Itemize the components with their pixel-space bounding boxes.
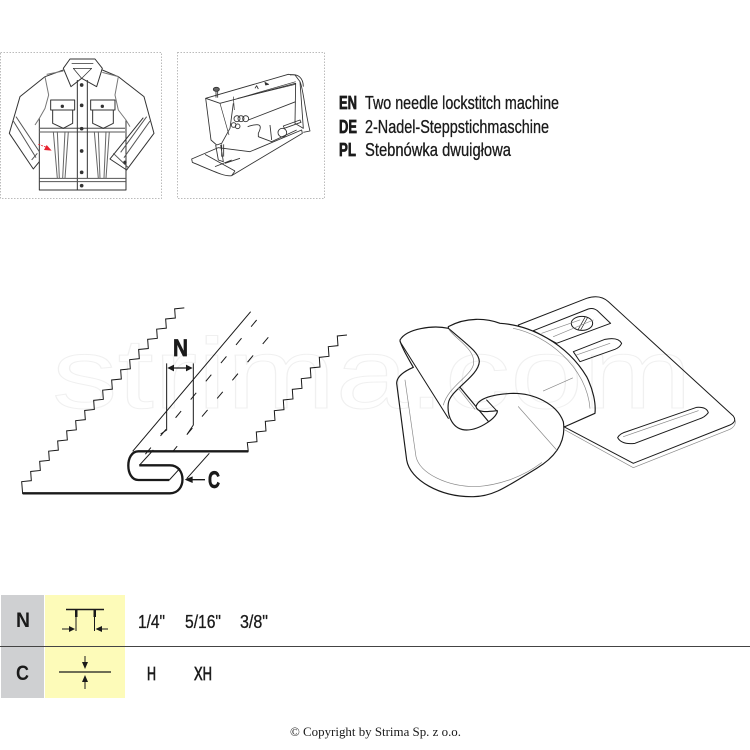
copyright: © Copyright by Strima Sp. z o.o. [290, 724, 461, 739]
watermark: strima.com [52, 318, 692, 430]
dimension N [161, 363, 193, 434]
diagram: fabric fold cross-section [22, 308, 347, 494]
row C: H [147, 664, 156, 684]
panel: jacket [0, 52, 162, 198]
icon: material thickness [59, 656, 111, 689]
panel: sewing machine [178, 52, 324, 198]
fold profile [23, 451, 248, 493]
label: EN: Two needle lockstitch machine [365, 93, 559, 113]
right fabric zigzag edge [247, 335, 347, 452]
folder curl [397, 327, 564, 497]
icon: sewing machine drawing [192, 74, 310, 176]
row C: XH [194, 664, 212, 684]
row N: 1/4" [138, 612, 165, 632]
row C [1, 647, 212, 698]
label: DE: 2-Nadel-Steppstichmaschine [365, 117, 549, 137]
base plate [518, 297, 735, 468]
icon: jacket drawing [9, 59, 154, 190]
row N: 5/16" [185, 612, 221, 632]
fold lines [133, 312, 251, 480]
table: sizes [0, 595, 750, 698]
folder dome [448, 319, 595, 427]
label: DE: DE [339, 117, 357, 137]
stitch lines [143, 320, 268, 457]
label: PL: Stebnówka dwuigłowa [365, 140, 512, 160]
label: PL: PL [339, 140, 356, 160]
icon: seam width [62, 610, 108, 632]
illustration: folder attachment [397, 297, 735, 497]
upper fabric zigzag edge [22, 308, 184, 494]
row N [1, 595, 268, 646]
dimension C [188, 478, 205, 482]
row N: 3/8" [240, 612, 268, 632]
label N: N [173, 335, 188, 362]
icon: red arrow [38, 144, 52, 151]
text block: machine names [339, 93, 559, 160]
label C: C [208, 467, 220, 494]
row N: N [16, 609, 30, 632]
label: EN: EN [339, 93, 357, 113]
row C: C [16, 662, 29, 685]
